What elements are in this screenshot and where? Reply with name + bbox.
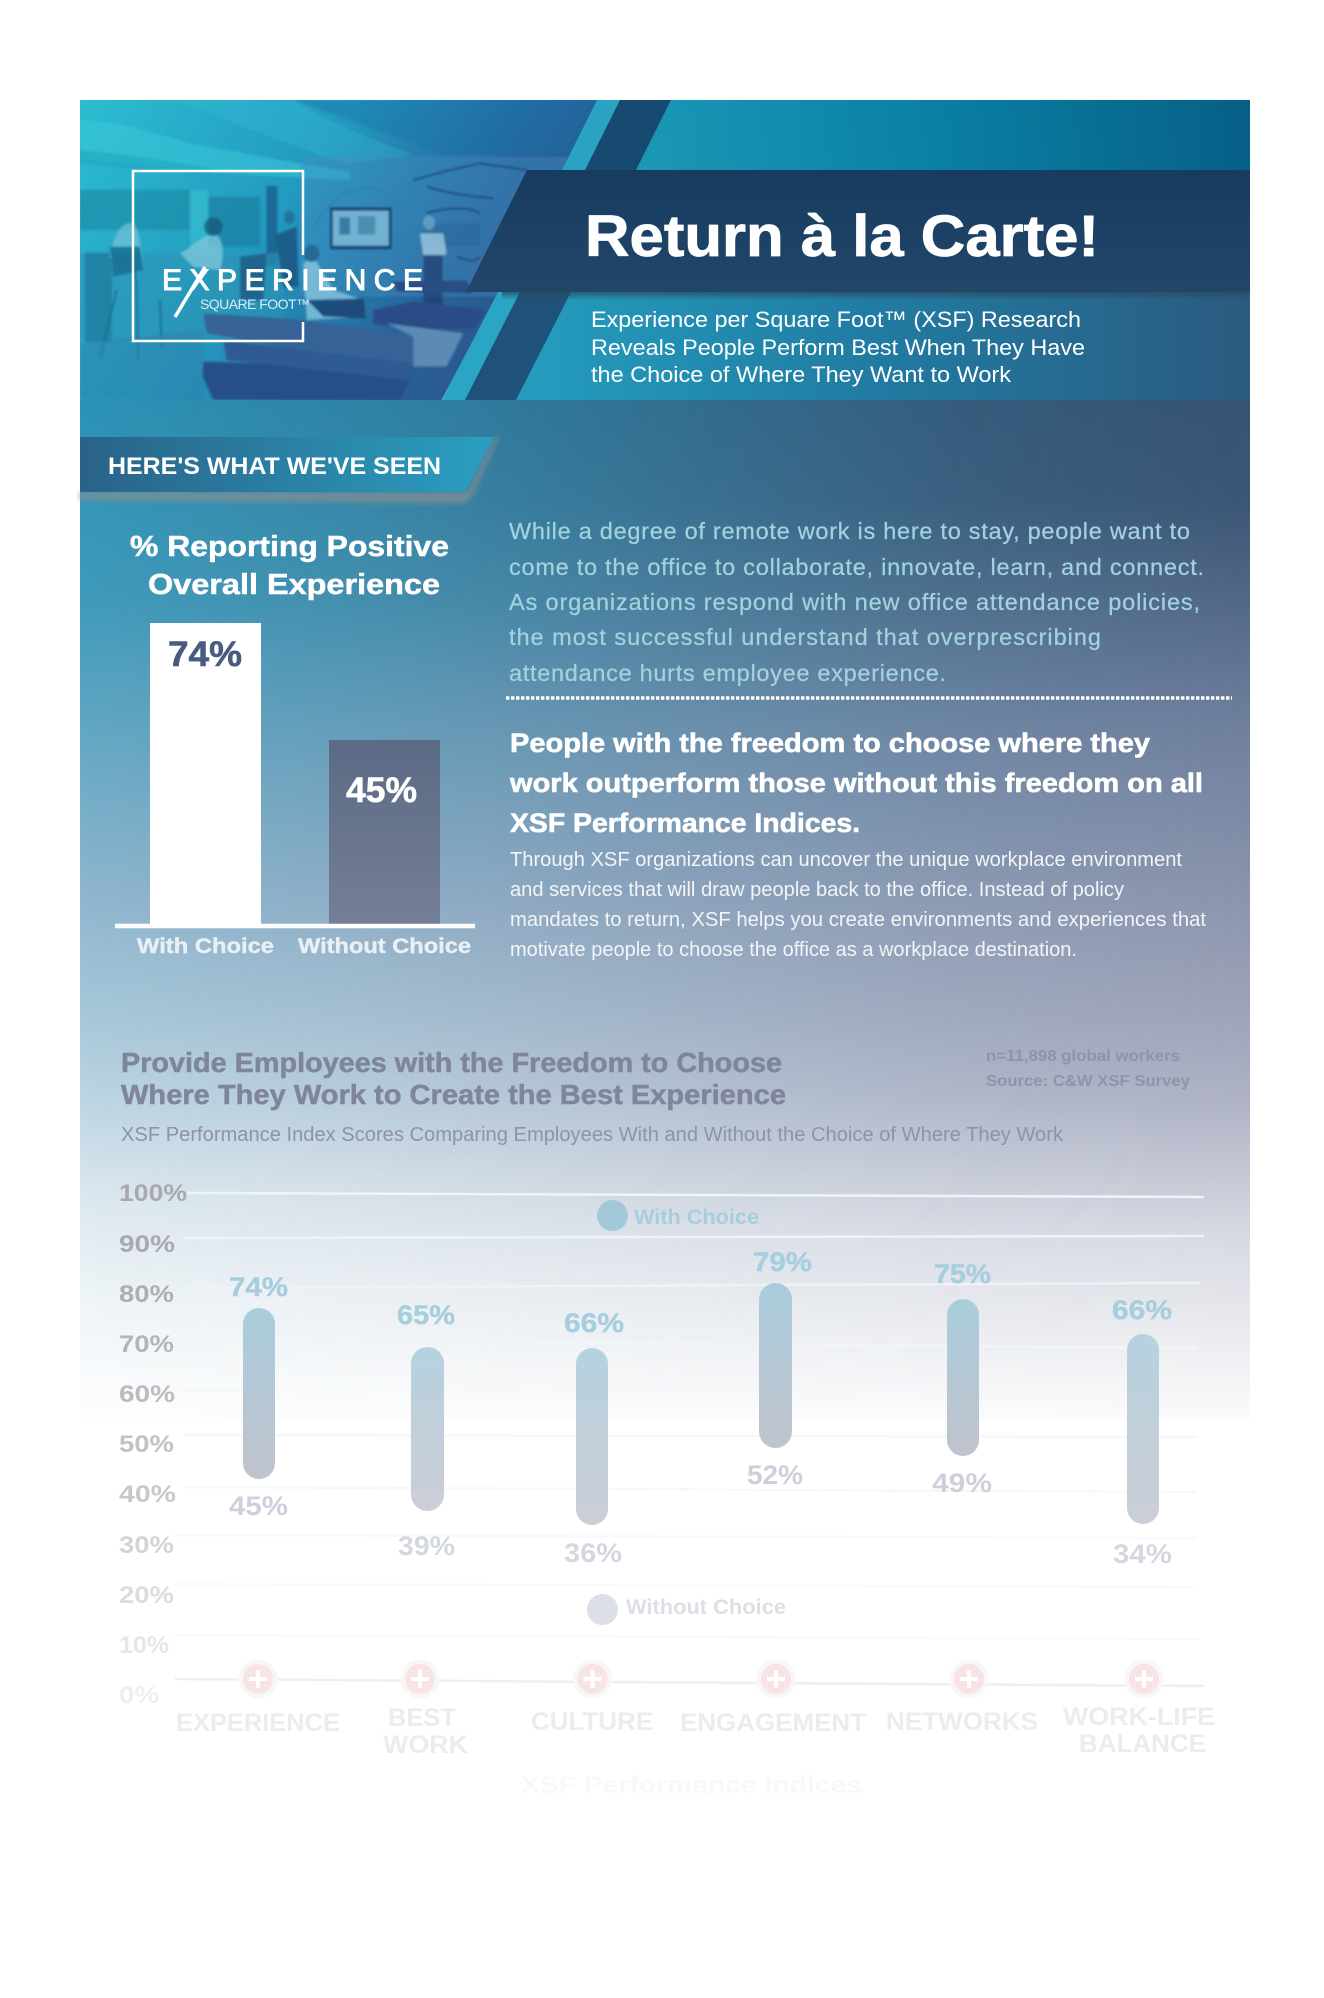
with-choice values: 66% bbox=[1112, 1295, 1172, 1325]
category labels: WORK-LIFE bbox=[1063, 1703, 1215, 1731]
header upper right background bbox=[562, 100, 1250, 170]
subtitle: Experience per Square Foot™ (XSF) Research bbox=[591, 307, 1081, 332]
screen bbox=[330, 207, 392, 249]
text block: intro paragraph: attendance hurts employee experience. bbox=[509, 660, 946, 686]
chart: positive experience bar chart bbox=[115, 531, 475, 958]
category labels: BALANCE bbox=[1079, 1730, 1206, 1758]
axis labels: 70% bbox=[119, 1331, 174, 1358]
chart heading bbox=[130, 531, 449, 601]
chart subtitle: XSF Performance Index Scores Comparing Employees With and Without the Choice of Where They Work bbox=[121, 1124, 1064, 1146]
banner heading: HERE'S WHAT WE'VE SEEN bbox=[108, 453, 441, 480]
floor bbox=[80, 330, 203, 400]
icon: work-life balance bbox=[1124, 1660, 1164, 1698]
with-choice values: 65% bbox=[397, 1300, 455, 1330]
panel: section banner bbox=[80, 437, 499, 503]
legend: without choice bbox=[587, 1594, 786, 1625]
chart: performance index scores bbox=[119, 1180, 1215, 1799]
logo tagline: SQUARE FOOT™ bbox=[200, 296, 310, 312]
bar labels: Without Choice bbox=[298, 935, 471, 958]
without-choice values: 52% bbox=[747, 1460, 803, 1490]
category labels: NETWORKS bbox=[886, 1708, 1038, 1736]
text block: supporting copy: and services that will draw people back to the office. Instead of policy bbox=[510, 879, 1124, 901]
bar: with choice bbox=[150, 623, 261, 926]
source note: Source: C&W XSF Survey bbox=[986, 1073, 1190, 1090]
without-choice values: 49% bbox=[932, 1468, 992, 1498]
cyan stripe lower bbox=[442, 292, 520, 400]
heading: lower section bbox=[121, 1047, 786, 1110]
category labels: CULTURE bbox=[531, 1708, 653, 1736]
cyan stripe upper bbox=[562, 100, 620, 170]
icon: culture bbox=[573, 1660, 612, 1698]
grid lines bbox=[175, 1193, 1204, 1686]
source note: n=11,898 global workers bbox=[986, 1048, 1180, 1065]
text block: supporting copy: mandates to return, XSF helps you create environments and experiences that bbox=[510, 909, 1206, 931]
with-choice values: 74% bbox=[229, 1272, 288, 1302]
value 45%: 45% bbox=[346, 771, 417, 810]
wall bbox=[300, 157, 600, 297]
subtitle: the Choice of Where They Want to Work bbox=[591, 362, 1012, 387]
without-choice values bbox=[229, 1460, 1172, 1569]
category labels: BEST bbox=[388, 1704, 456, 1732]
axis labels: 60% bbox=[119, 1381, 175, 1408]
axis labels: 80% bbox=[119, 1281, 174, 1308]
category labels: ENGAGEMENT bbox=[680, 1709, 866, 1737]
bar: without choice bbox=[329, 740, 440, 925]
subtitle bbox=[591, 307, 1085, 387]
without-choice values: 39% bbox=[398, 1531, 455, 1561]
subtitle: Reveals People Perform Best When They Have bbox=[591, 335, 1085, 360]
sofas bbox=[393, 280, 473, 293]
heading: lower section: Provide Employees with the Freedom to Choose bbox=[121, 1047, 782, 1078]
icons: plus badges bbox=[238, 1660, 1164, 1698]
value 74%: 74% bbox=[168, 635, 242, 674]
axis labels: 30% bbox=[119, 1532, 174, 1559]
panel: gradient background bbox=[80, 400, 1250, 1420]
without-choice values: 45% bbox=[229, 1491, 288, 1521]
logo bbox=[133, 171, 423, 341]
with-choice values: 75% bbox=[934, 1259, 991, 1289]
text block: supporting copy: Through XSF organizations can uncover the unique workplace environment bbox=[510, 849, 1182, 871]
axis labels: 90% bbox=[119, 1231, 175, 1258]
navy stripe lower bbox=[465, 292, 571, 400]
axis labels: 0% bbox=[119, 1682, 159, 1709]
text block: intro paragraph: As organizations respond with new office attendance policies, bbox=[509, 589, 1200, 615]
without-choice values: 36% bbox=[564, 1538, 622, 1568]
chart heading: % Reporting Positive bbox=[130, 531, 449, 563]
bar labels: With Choice bbox=[137, 935, 274, 958]
axis labels: 20% bbox=[119, 1582, 174, 1609]
with-choice values bbox=[229, 1247, 1172, 1338]
source note bbox=[986, 1048, 1190, 1090]
axis labels: 40% bbox=[119, 1481, 176, 1508]
panel: header bbox=[80, 100, 1250, 400]
with-choice values: 79% bbox=[753, 1247, 812, 1277]
cabinets and door bbox=[80, 190, 190, 230]
axis labels: 100% bbox=[119, 1180, 187, 1207]
text block: intro paragraph bbox=[509, 518, 1204, 686]
heading: lower section: Where They Work to Create the Best Experience bbox=[121, 1079, 786, 1110]
legend: without choice: Without Choice bbox=[626, 1596, 786, 1619]
legend: with choice: With Choice bbox=[634, 1206, 759, 1229]
range bars bbox=[243, 1283, 1159, 1525]
logo frame bbox=[133, 171, 303, 341]
text block: intro paragraph: come to the office to collaborate, innovate, learn, and connect. bbox=[509, 554, 1204, 580]
icon: best work bbox=[400, 1660, 440, 1698]
title band bbox=[466, 170, 1250, 292]
logo wordmark: EXPERIENCE bbox=[162, 264, 423, 297]
icon: experience bbox=[238, 1660, 278, 1698]
axis labels: 10% bbox=[119, 1632, 169, 1659]
category labels: WORK bbox=[383, 1731, 468, 1759]
text block: supporting copy: motivate people to choose the office as a workplace destination. bbox=[510, 939, 1077, 961]
icon: engagement bbox=[756, 1660, 796, 1698]
people bbox=[110, 211, 447, 320]
text block: key message: work outperform those without this freedom on all bbox=[509, 768, 1203, 798]
navy stripe upper bbox=[585, 100, 671, 170]
text block: key message: People with the freedom to choose where they bbox=[510, 728, 1150, 758]
axis labels bbox=[119, 1180, 187, 1709]
title: Return à la Carte! bbox=[585, 204, 1099, 269]
icon: networks bbox=[950, 1660, 988, 1698]
text block: key message: XSF Performance Indices. bbox=[510, 808, 860, 838]
with-choice values: 66% bbox=[564, 1308, 624, 1338]
header photo bbox=[80, 100, 613, 400]
counter bbox=[80, 253, 283, 340]
axis labels: 50% bbox=[119, 1431, 174, 1458]
bar labels bbox=[137, 935, 471, 958]
text block: intro paragraph: While a degree of remote work is here to stay, people want to bbox=[509, 518, 1190, 544]
stools bbox=[100, 258, 162, 360]
axis title: XSF Performance Indices bbox=[521, 1772, 862, 1799]
text block: supporting copy bbox=[510, 849, 1206, 961]
chart heading: Overall Experience bbox=[148, 569, 440, 601]
header lower right background bbox=[442, 292, 1250, 400]
category labels: EXPERIENCE bbox=[176, 1709, 340, 1737]
legend: with choice bbox=[597, 1200, 759, 1231]
category labels bbox=[176, 1703, 1215, 1759]
text block: key message bbox=[509, 728, 1203, 838]
without-choice values: 34% bbox=[1113, 1539, 1172, 1569]
text block: intro paragraph: the most successful understand that overprescribing bbox=[509, 624, 1101, 650]
